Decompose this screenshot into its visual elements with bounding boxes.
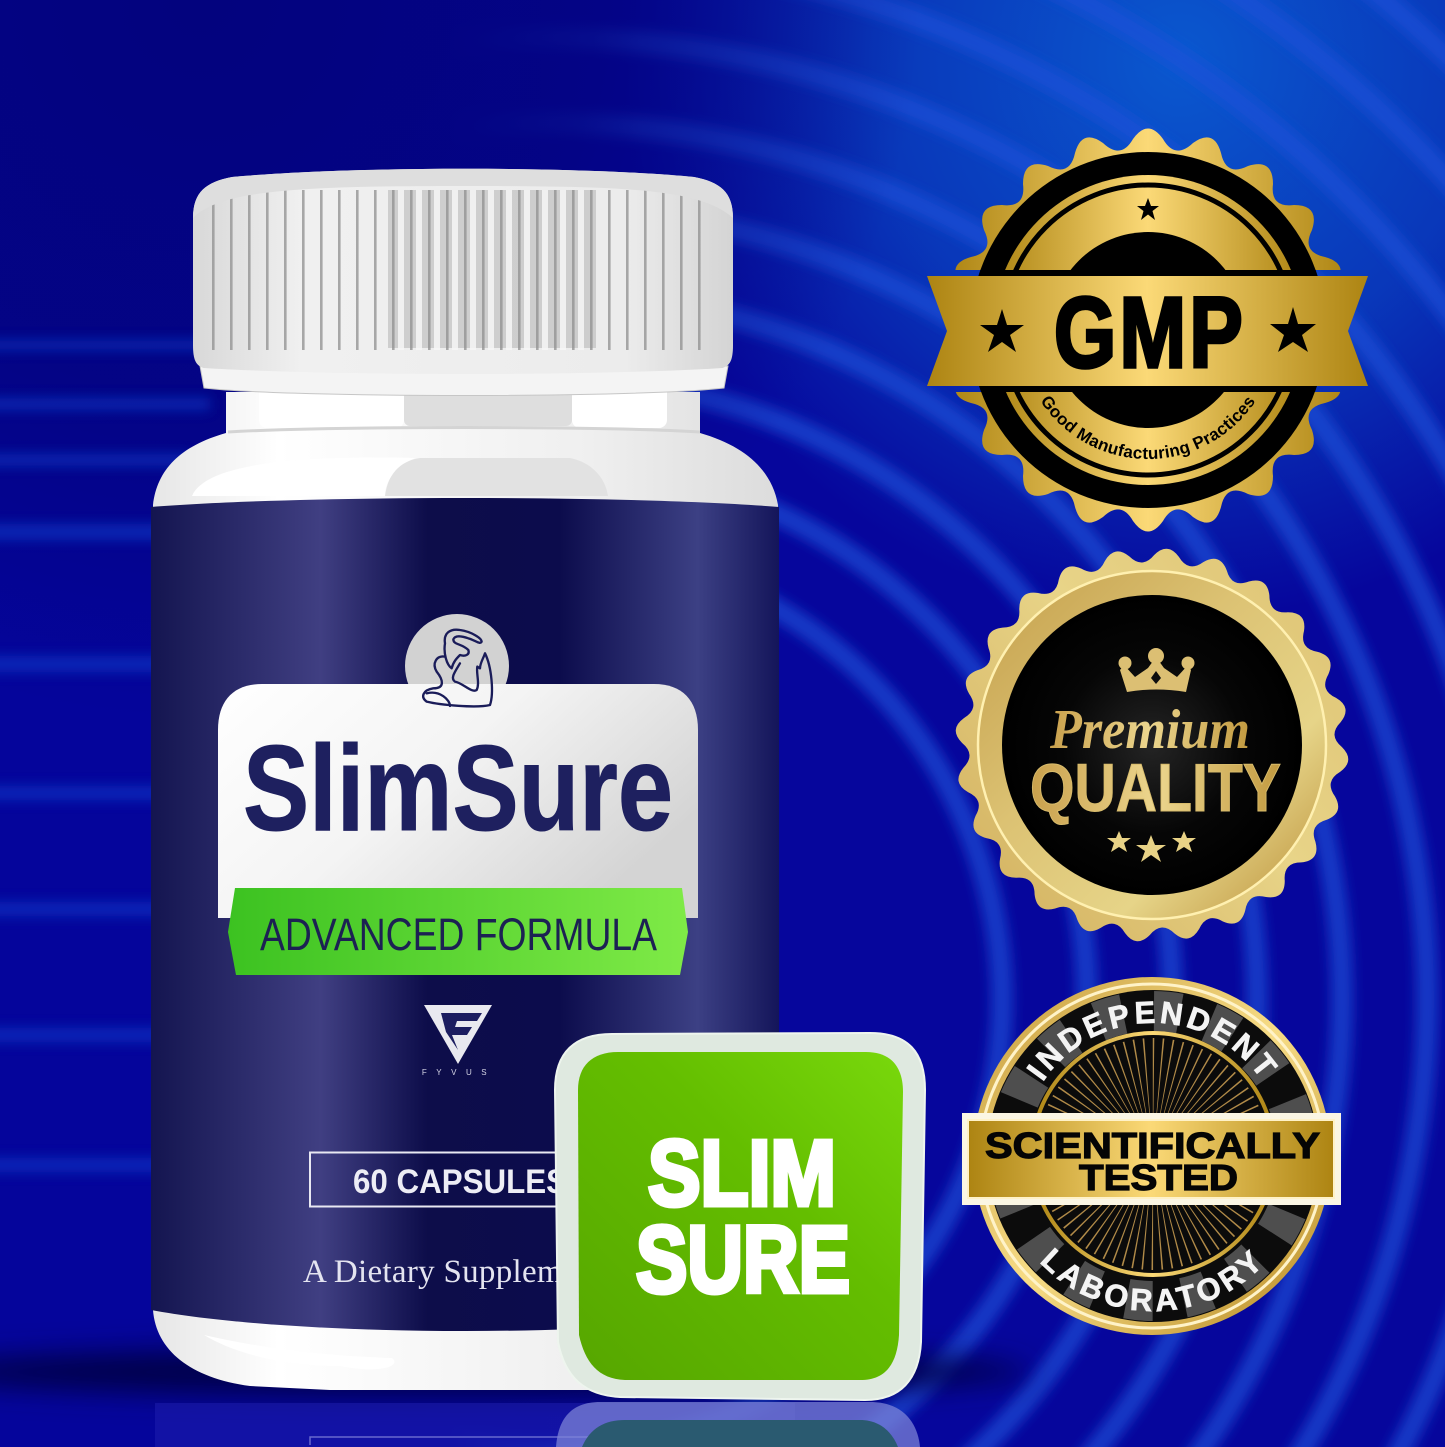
bottle cap — [193, 169, 733, 374]
premium rings — [978, 571, 1326, 919]
tested gold rim — [973, 977, 1331, 1335]
banner text: ADVANCED FORMULA — [260, 909, 657, 960]
badge: scientifically tested — [962, 977, 1341, 1335]
neck highlights — [192, 384, 700, 496]
tested rays — [1075, 1076, 1231, 1232]
green cube — [555, 1033, 925, 1400]
tested inner disc — [1032, 1033, 1274, 1275]
premium stars — [1107, 831, 1196, 862]
GMP top star — [1137, 198, 1159, 220]
premium text: Premium — [1049, 699, 1250, 761]
brand mark FYVUS — [422, 1005, 496, 1077]
top arc text: INDEPENDENT — [1026, 1001, 1278, 1082]
logo circle — [405, 614, 509, 718]
premium scalloped edge — [956, 548, 1348, 942]
green banner — [228, 888, 688, 975]
badge: premium quality — [956, 548, 1348, 942]
brand name: SlimSure — [243, 720, 673, 856]
supplement line: A Dietary Supplement — [303, 1254, 604, 1290]
banner line two: TESTED — [1079, 1157, 1238, 1198]
capsule count box: 60 CAPSULES — [353, 1163, 567, 1201]
GMP ribbon — [927, 276, 1368, 386]
quality text: QUALITY — [1030, 750, 1281, 826]
GMP text: GMP — [1054, 278, 1243, 389]
premium black disc — [1002, 595, 1302, 895]
bottle body — [153, 392, 778, 1390]
GMP curved caption: Good Manufacturing Practices — [1042, 396, 1254, 460]
cube frame — [555, 1033, 925, 1400]
capsule count box — [310, 1152, 610, 1206]
GMP rings — [960, 152, 1336, 508]
cube face — [578, 1052, 903, 1380]
icon: crown — [1118, 648, 1194, 692]
bottle label — [151, 498, 779, 1331]
GMP scalloped edge — [946, 128, 1350, 532]
bottom highlight — [204, 1335, 394, 1369]
GMP ribbon stars — [980, 307, 1316, 352]
bottle — [151, 169, 779, 1390]
cube text: SLIM — [648, 1121, 836, 1225]
icon: flexing figure logo — [423, 630, 492, 706]
green cube: SURE — [636, 1207, 850, 1313]
neck ring — [200, 366, 728, 396]
floor reflection — [155, 1402, 920, 1447]
bottom arc text: LABORATORY — [1040, 1247, 1258, 1312]
tested banner — [962, 1113, 1341, 1205]
banner line one: SCIENTIFICALLY — [985, 1125, 1320, 1166]
badge: GMP — [927, 128, 1368, 532]
tested black ring — [987, 990, 1319, 1322]
floor shadow — [0, 1348, 1030, 1396]
white label panel — [218, 684, 698, 918]
brand mark FYVUS: FYVUS — [422, 1068, 496, 1077]
